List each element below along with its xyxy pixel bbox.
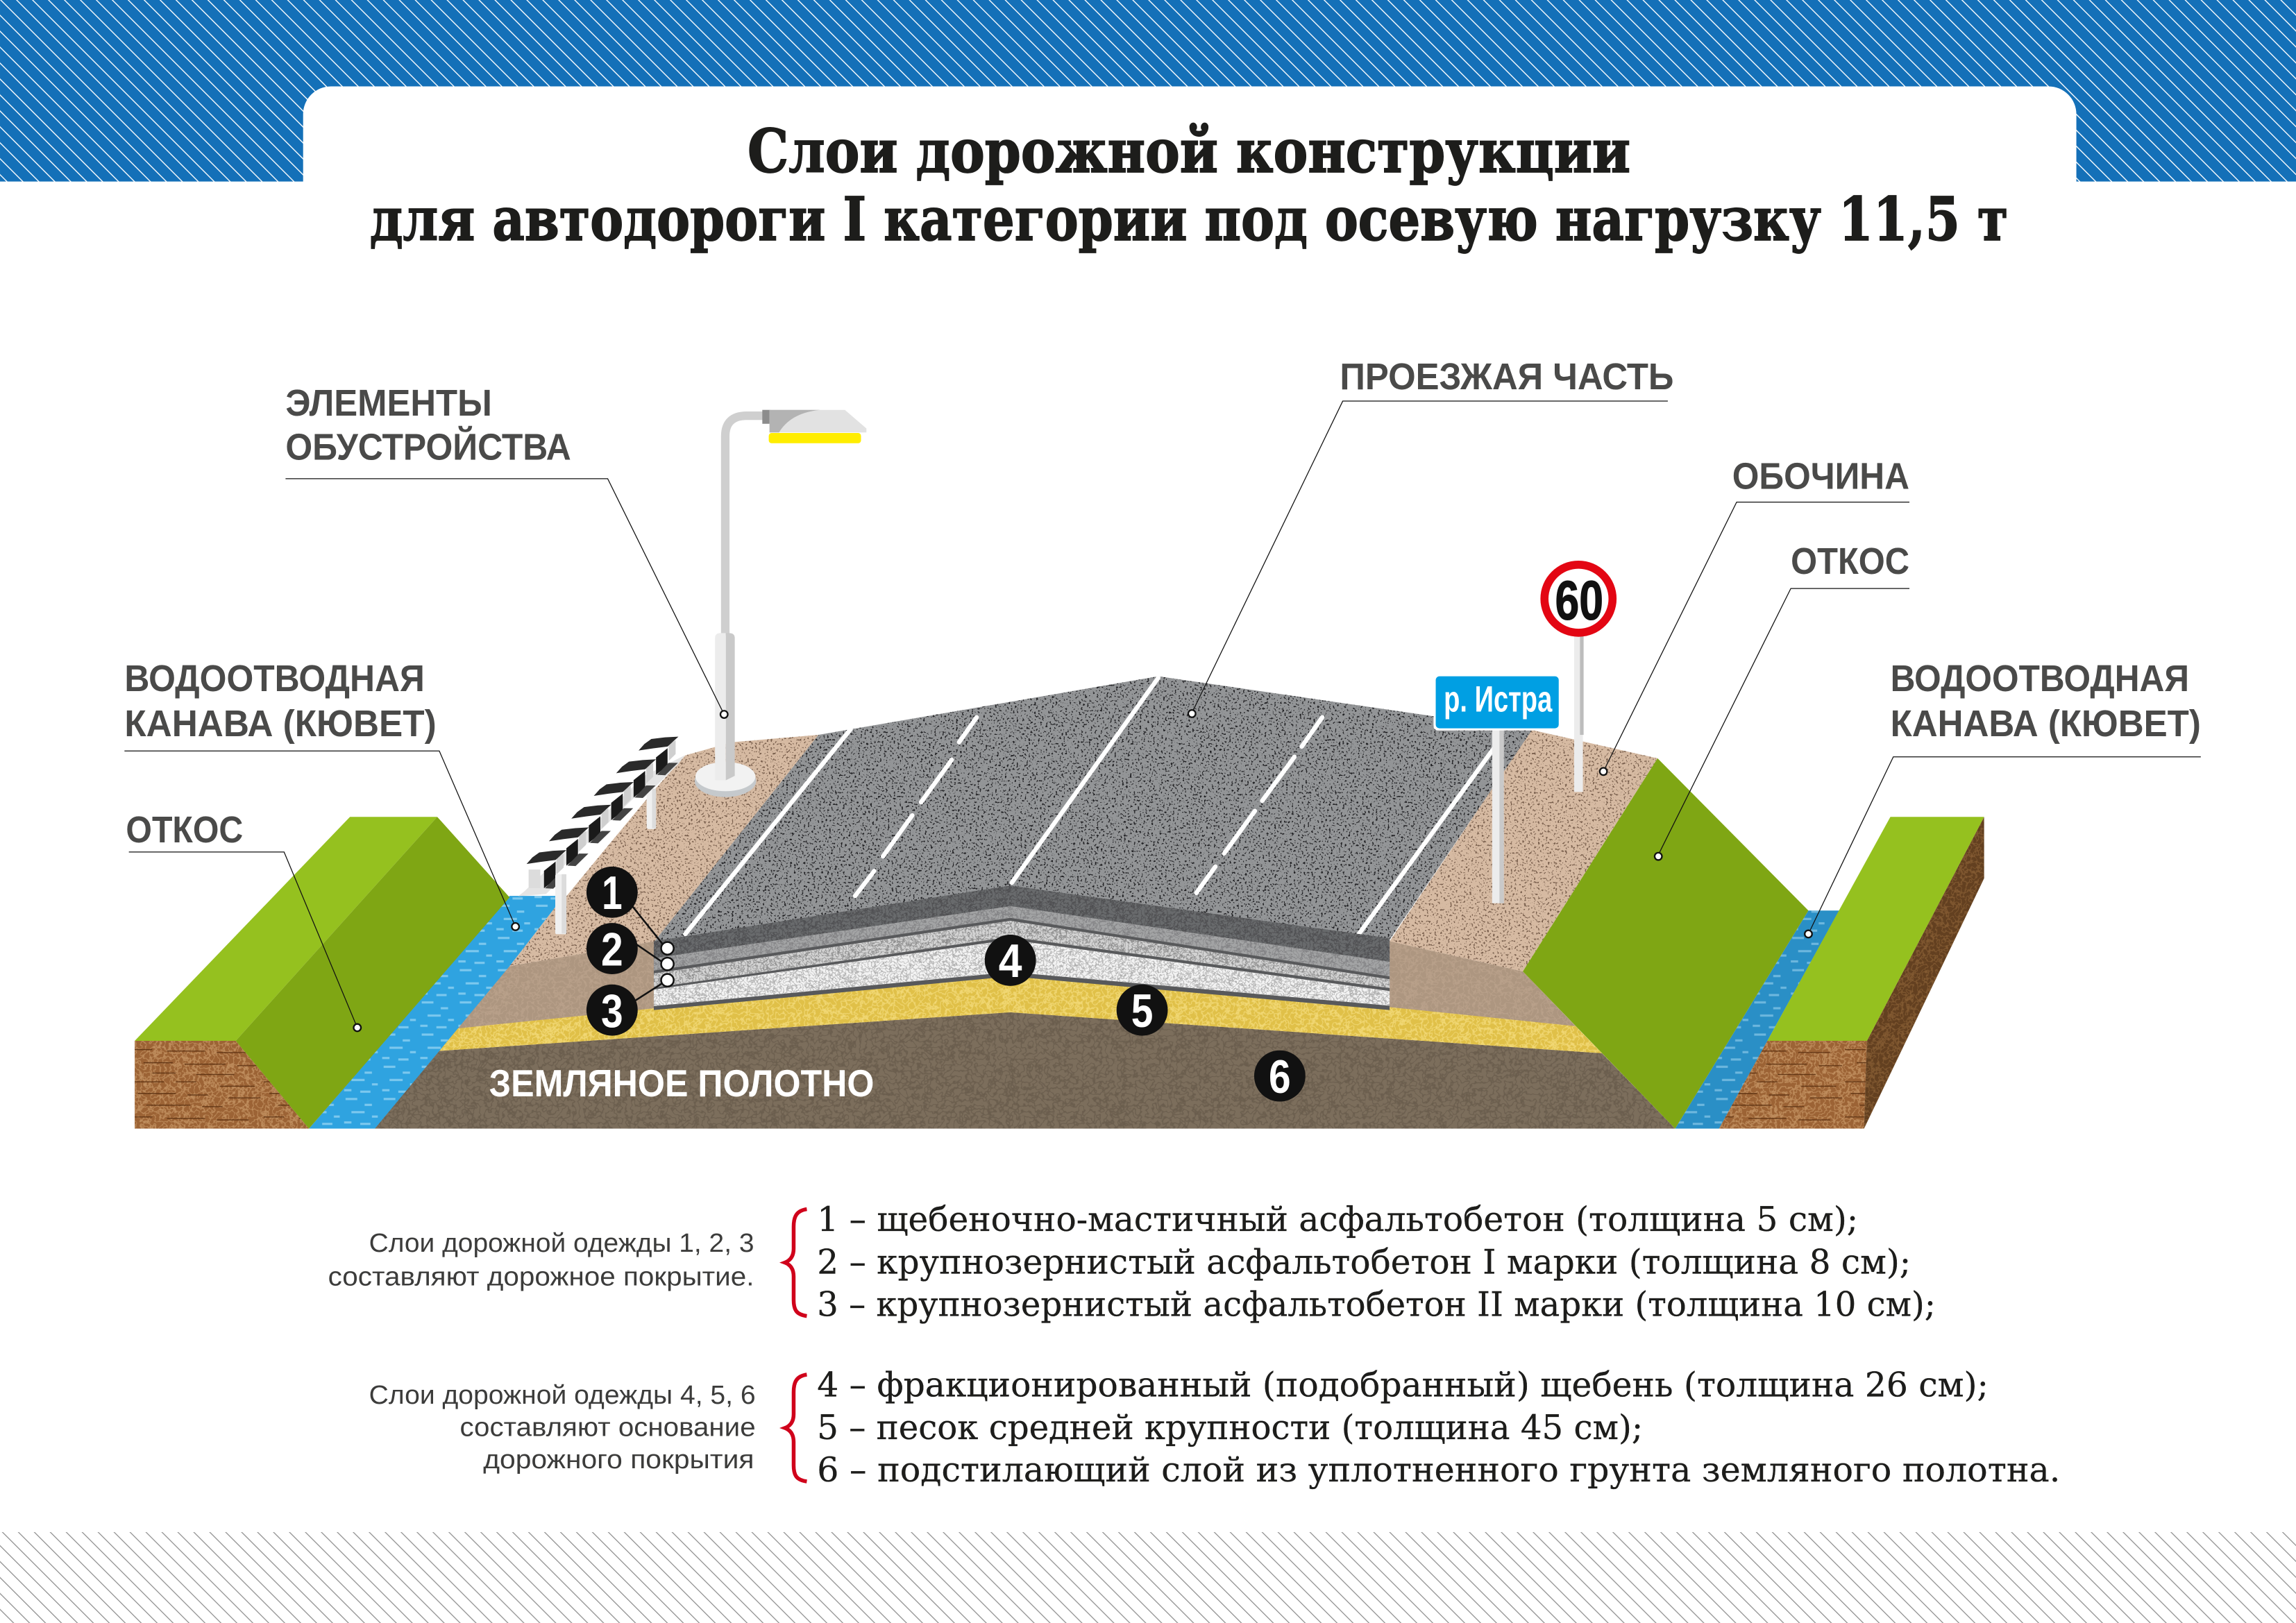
- layer connectors 1-3: [631, 905, 674, 1001]
- layer 4 crushed stone: [654, 940, 1390, 1006]
- badge 4: [985, 935, 1036, 987]
- legend: layers 4-6: 6 – подстилающий слой из уплотненного грунта земляного полотна.: [817, 1451, 2060, 1490]
- legend: layers 1-3: [817, 1200, 1936, 1325]
- brace: layers 1-3: [785, 1209, 807, 1316]
- right water ditch: [1675, 910, 1839, 1129]
- left bank soil front: [135, 1041, 309, 1129]
- left slope: [236, 817, 509, 1129]
- callout: left ditch: КАНАВА (КЮВЕТ): [124, 703, 437, 745]
- badge 2: 2: [601, 924, 623, 976]
- street lamp: [695, 410, 866, 797]
- legend: layers 4-6: [817, 1366, 2060, 1490]
- badge 2: [586, 923, 638, 976]
- callout: furnishing elements: ЭЛЕМЕНТЫ: [285, 382, 492, 424]
- right bank soil front: [1719, 1041, 1867, 1129]
- callout: right ditch: [1805, 658, 2201, 937]
- right roadbed side: [1390, 942, 1578, 1029]
- left bank dark cracks: [135, 1041, 309, 1129]
- title panel: [303, 86, 2077, 183]
- river name sign: [1433, 675, 1561, 903]
- callout: left ditch: [124, 658, 519, 931]
- callout: left slope: [126, 809, 361, 1031]
- badge 3: [586, 985, 638, 1037]
- layer 2: [654, 906, 1390, 976]
- note: pavement layers: [328, 1229, 754, 1291]
- badge 6: 6: [1269, 1051, 1291, 1103]
- title: для автодороги I категории под осевую нагрузку 11,5 т: [370, 185, 2008, 255]
- note: base layers: дорожного покрытия: [483, 1445, 754, 1475]
- title: [370, 117, 2008, 255]
- legend: layers 4-6: 5 – песок средней крупности (толщина 45 см);: [817, 1409, 1643, 1447]
- callout: shoulder: [1600, 456, 1909, 775]
- note: pavement layers: Слои дорожной одежды 1, 2, 3: [369, 1229, 754, 1258]
- metal road barrier: [518, 737, 685, 934]
- callout: furnishing elements: [285, 382, 728, 718]
- pavement layer stack: [654, 885, 1390, 1010]
- river name sign: р. Истра: [1444, 679, 1553, 720]
- note: pavement layers: составляют дорожное покрытие.: [328, 1262, 754, 1291]
- right slope: [1523, 758, 1808, 1129]
- left bank grass top: [135, 817, 437, 1041]
- badge 3: 3: [601, 985, 623, 1037]
- left water ditch: [309, 896, 558, 1129]
- layer 1 SMA: [654, 885, 1390, 962]
- callout: shoulder: ОБОЧИНА: [1732, 456, 1909, 498]
- legend: layers 1-3: 2 – крупнозернистый асфальтобетон I марки (толщина 8 см);: [817, 1243, 1911, 1282]
- badge 5: [1117, 985, 1167, 1037]
- brace: layers 4-6: [785, 1375, 807, 1481]
- badge 1: 1: [602, 867, 623, 919]
- asphalt road surface: [655, 677, 1532, 942]
- badge 6: [1254, 1051, 1306, 1103]
- note: base layers: Слои дорожной одежды 4, 5, 6: [369, 1381, 756, 1410]
- right bank dark cracks: [1719, 1041, 1867, 1129]
- callout: right ditch: КАНАВА (КЮВЕТ): [1891, 703, 2201, 745]
- speed limit sign 60: 60: [1555, 568, 1603, 631]
- right bank grass top: [1767, 817, 1984, 1041]
- callout: carriageway: ПРОЕЗЖАЯ ЧАСТЬ: [1340, 356, 1673, 398]
- speed limit sign 60: [1540, 561, 1617, 792]
- top hatched blue band: [0, 0, 2296, 182]
- layer 3: [654, 921, 1390, 988]
- legend: layers 1-3: 1 – щебеночно-мастичный асфальтобетон (толщина 5 см);: [817, 1200, 1858, 1239]
- subgrade label: ЗЕМЛЯНОЕ ПОЛОТНО: [489, 1062, 874, 1105]
- title: Слои дорожной конструкции: [748, 117, 1630, 187]
- legend: layers 4-6: 4 – фракционированный (подобранный) щебень (толщина 26 см);: [817, 1366, 1989, 1405]
- earth subgrade: [372, 1012, 1675, 1129]
- right shoulder: [1390, 730, 1657, 971]
- left roadbed side: [448, 942, 655, 1033]
- right bank soil side: [1864, 817, 1984, 1129]
- callout: right slope: [1655, 541, 1909, 860]
- legend: layers 1-3: 3 – крупнозернистый асфальтобетон II марки (толщина 10 см);: [817, 1286, 1936, 1325]
- callout: left ditch: ВОДООТВОДНАЯ: [124, 658, 425, 699]
- badge 4: 4: [999, 935, 1022, 987]
- bottom hatched band: [0, 1532, 2296, 1623]
- callout: left slope: ОТКОС: [126, 809, 243, 851]
- note: base layers: [369, 1381, 756, 1475]
- left shoulder: [509, 735, 818, 966]
- callout: right slope: ОТКОС: [1791, 541, 1909, 582]
- badge 1: [586, 867, 638, 919]
- note: base layers: составляют основание: [459, 1413, 756, 1443]
- callout: furnishing elements: ОБУСТРОЙСТВА: [285, 425, 571, 468]
- badge 5: 5: [1131, 985, 1153, 1037]
- road cross-section diagram: [135, 410, 1984, 1129]
- callout: carriageway: [1188, 356, 1673, 717]
- sand layer 5: [437, 974, 1602, 1053]
- callout: right ditch: ВОДООТВОДНАЯ: [1891, 658, 2189, 699]
- road markings: [685, 678, 1495, 934]
